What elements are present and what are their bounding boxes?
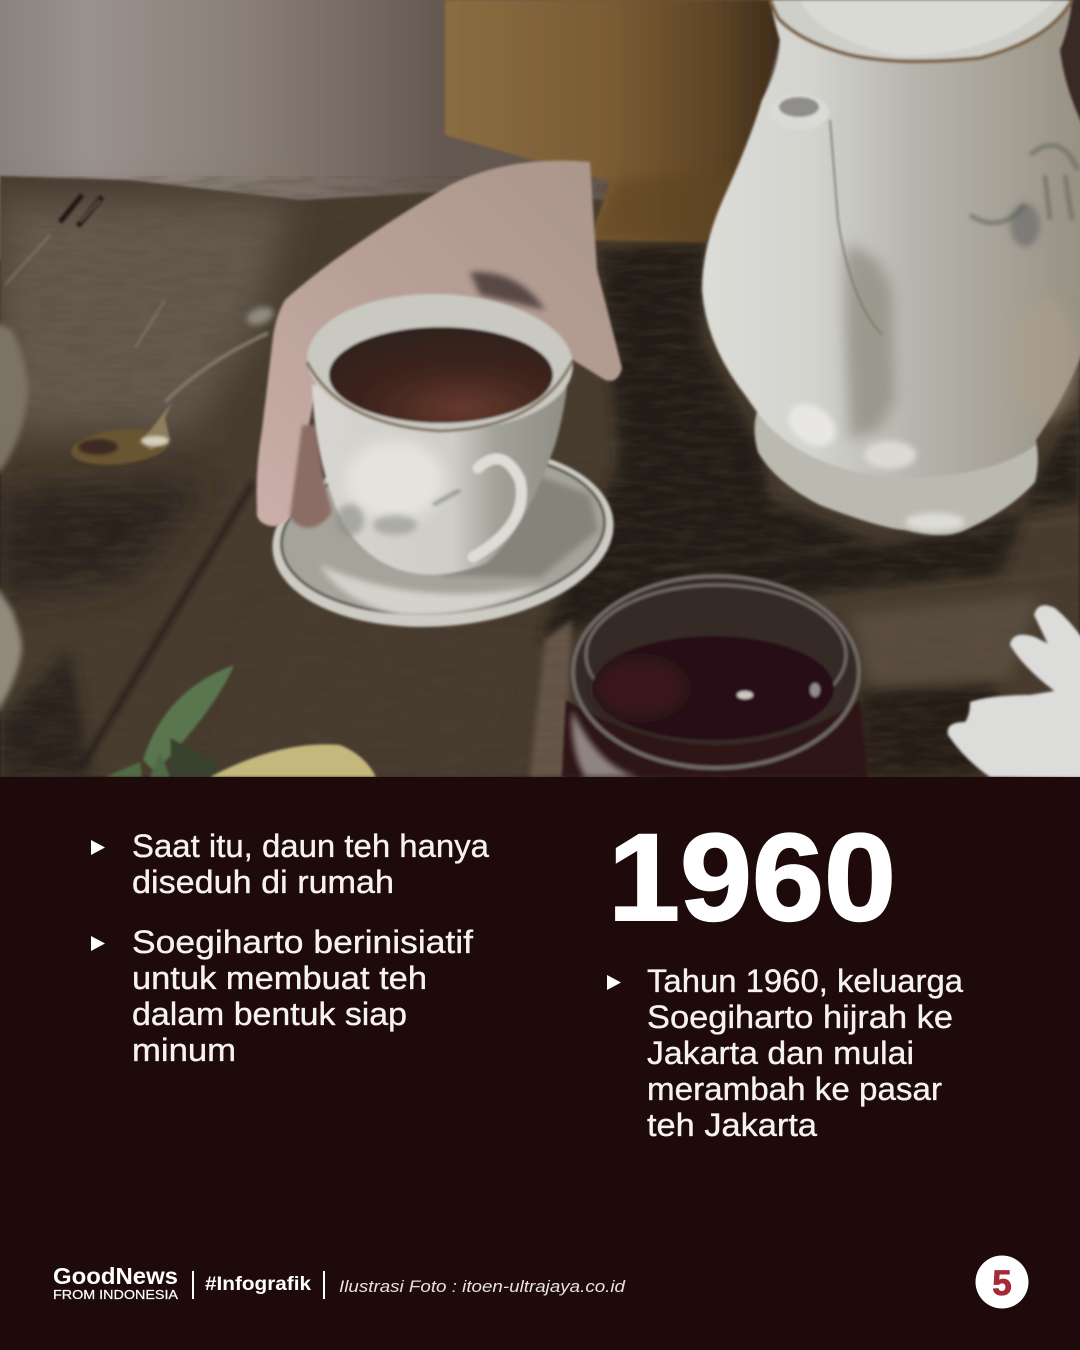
saucer	[270, 458, 616, 629]
bullet point: teh siap minum: dalam bentuk siap	[132, 996, 407, 1032]
bullets: left column	[91, 828, 489, 1068]
photo: tea service on wooden table	[0, 0, 1080, 778]
bullet point: teh siap minum: minum	[132, 1032, 236, 1068]
hand	[257, 161, 622, 528]
base	[755, 412, 1038, 535]
bullet point: hijrah ke Jakarta: Tahun 1960, keluarga	[647, 963, 963, 999]
footer	[53, 1256, 1028, 1308]
bullet point: teh siap minum: untuk membuat teh	[132, 960, 427, 996]
sleeve	[445, 0, 780, 242]
logo: GoodNews from Indonesia: GoodNews	[53, 1263, 178, 1289]
bullet point: hijrah ke Jakarta: Soegiharto hijrah ke	[647, 999, 953, 1035]
lid	[770, 0, 1072, 61]
leaves	[105, 665, 234, 777]
bullet point: daun teh diseduh di rumah	[91, 828, 489, 900]
bullet point: teh siap minum	[91, 924, 473, 1068]
page number badge	[976, 1256, 1028, 1308]
bullet point: hijrah ke Jakarta	[607, 963, 963, 1143]
photo credit: Ilustrasi Foto : itoen-ultrajaya.co.id	[339, 1277, 626, 1296]
spoon	[69, 304, 276, 469]
left table objects	[0, 322, 28, 716]
page number badge: 5	[992, 1264, 1012, 1303]
hashtag: #Infografik	[205, 1274, 311, 1295]
spout mouth	[816, 100, 828, 124]
jam jar	[562, 574, 868, 777]
teapot	[702, 0, 1080, 535]
bullet point: hijrah ke Jakarta: Jakarta dan mulai	[647, 1035, 914, 1071]
logo: GoodNews from Indonesia: FROM INDONESIA	[53, 1288, 179, 1302]
bullet point: daun teh diseduh di rumah: diseduh di rumah	[132, 864, 394, 900]
wall backdrop	[0, 0, 1080, 260]
logo: GoodNews from Indonesia	[53, 1263, 179, 1302]
bullet point: daun teh diseduh di rumah: Saat itu, daun teh hanya	[132, 828, 489, 864]
wooden table	[0, 176, 1080, 777]
bullet point: teh siap minum: Soegiharto berinisiatif	[132, 924, 473, 960]
floral decoration	[970, 145, 1078, 223]
lemon	[210, 744, 376, 777]
bullet point: hijrah ke Jakarta: merambah ke pasar	[647, 1071, 942, 1107]
year heading: 1960	[608, 809, 896, 947]
bullet point: hijrah ke Jakarta: teh Jakarta	[647, 1107, 817, 1143]
cup	[305, 289, 575, 575]
spout shadow	[845, 245, 895, 440]
white flower	[948, 605, 1080, 778]
